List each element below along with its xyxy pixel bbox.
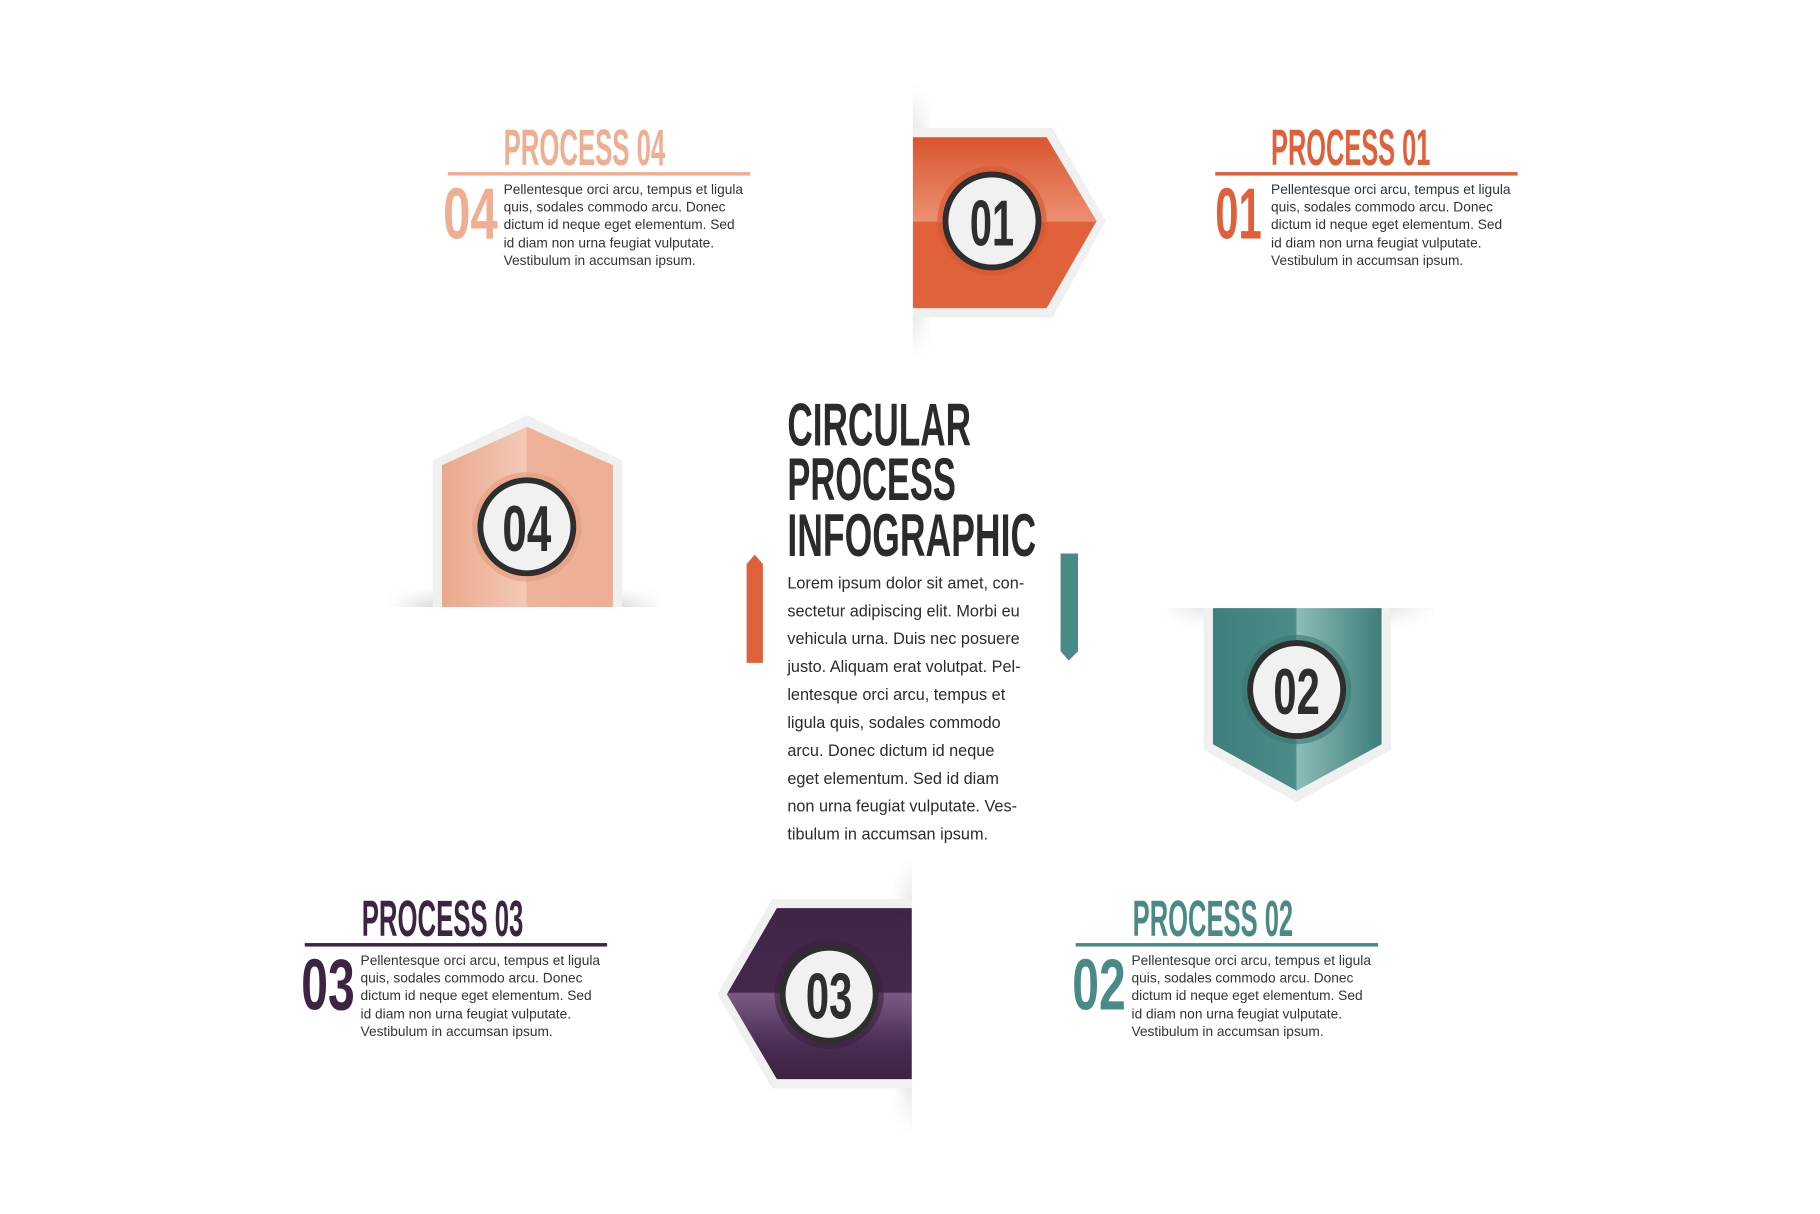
center body text: arcu. Donec dictum id neque (787, 742, 994, 760)
process 03 text block: 03 (301, 945, 355, 1025)
process 04 text block (443, 119, 750, 268)
marker 01: orange arrow: 01 (970, 186, 1014, 259)
process 01 text block: Vestibulum in accumsan ipsum. (1271, 253, 1463, 268)
process 02 text block: 02 (1072, 945, 1126, 1025)
process 04 text block: quis, sodales commodo arcu. Donec (504, 200, 726, 215)
center body text: vehicula urna. Duis nec posuere (787, 630, 1020, 648)
center title (787, 390, 1036, 569)
center body text: tibulum in accumsan ipsum. (787, 826, 988, 844)
process 04 text block: id diam non urna feugiat vulputate. (504, 236, 714, 251)
process 03 text block: quis, sodales commodo arcu. Donec (361, 971, 583, 986)
center body text: ligula quis, sodales commodo (787, 714, 1001, 732)
marker 03: purple arrow left: 03 (806, 960, 852, 1033)
process 03 text block: PROCESS 03 (362, 890, 523, 947)
process 01 text block: quis, sodales commodo arcu. Donec (1271, 200, 1493, 215)
shadow: right horizontal edge (1163, 608, 1433, 627)
center body text: sectetur adipiscing elit. Morbi eu (787, 602, 1020, 620)
center body text: lentesque orci arcu, tempus et (787, 686, 1006, 704)
process 01 text block (1215, 119, 1518, 268)
marker 01: orange arrow (913, 128, 1106, 317)
marker 04: salmon pointer up: 04 (502, 492, 551, 565)
center body text: eget elementum. Sed id diam (787, 770, 999, 788)
shadow: left horizontal edge (390, 588, 663, 607)
bar: orange accent (747, 555, 763, 663)
bar: teal accent (1061, 554, 1078, 660)
process 02 text block: id diam non urna feugiat vulputate. (1132, 1007, 1342, 1022)
process 04 text block: 04 (443, 174, 498, 254)
process 03 text block: Vestibulum in accumsan ipsum. (361, 1024, 553, 1039)
marker 02: teal pointer down (1204, 608, 1391, 802)
process 04 text block: Vestibulum in accumsan ipsum. (504, 253, 696, 268)
marker 04: salmon pointer up (433, 415, 622, 607)
center body text: justo. Aliquam erat volutpat. Pel- (786, 658, 1021, 676)
process 03 text block (301, 890, 607, 1039)
process 01 text block: 01 (1215, 174, 1262, 254)
shadow: bottom vertical edge (893, 860, 912, 1130)
process 01 text block: Pellentesque orci arcu, tempus et ligula (1271, 182, 1511, 197)
process 03 text block: id diam non urna feugiat vulputate. (361, 1007, 571, 1022)
shadow: top vertical edge (913, 87, 932, 357)
process 02 text block: Vestibulum in accumsan ipsum. (1132, 1024, 1324, 1039)
process 02 text block: quis, sodales commodo arcu. Donec (1132, 971, 1354, 986)
process 01 text block: dictum id neque eget elementum. Sed (1271, 217, 1502, 232)
process 03 text block: dictum id neque eget elementum. Sed (361, 988, 592, 1003)
process 02 text block: Pellentesque orci arcu, tempus et ligula (1132, 953, 1371, 968)
process 04 text block: dictum id neque eget elementum. Sed (504, 217, 735, 232)
center body text: non urna feugiat vulputate. Ves- (787, 798, 1017, 816)
process 03 text block: Pellentesque orci arcu, tempus et ligula (361, 953, 600, 968)
center title: INFOGRAPHIC (787, 501, 1036, 569)
process 02 text block: PROCESS 02 (1133, 890, 1293, 947)
process 01 text block: id diam non urna feugiat vulputate. (1271, 236, 1482, 251)
center title: PROCESS (787, 445, 956, 513)
process 02 text block (1072, 890, 1378, 1039)
process 01 text block: PROCESS 01 (1271, 119, 1430, 176)
center title: CIRCULAR (787, 390, 971, 458)
center body text: Lorem ipsum dolor sit amet, con- (787, 574, 1024, 592)
process 04 text block: Pellentesque orci arcu, tempus et ligula (504, 182, 743, 197)
marker 03: purple arrow left (718, 899, 912, 1088)
marker 02: teal pointer down: 02 (1273, 655, 1320, 728)
center body text (786, 574, 1024, 844)
process 04 text block: PROCESS 04 (504, 119, 665, 176)
process 02 text block: dictum id neque eget elementum. Sed (1132, 988, 1363, 1003)
